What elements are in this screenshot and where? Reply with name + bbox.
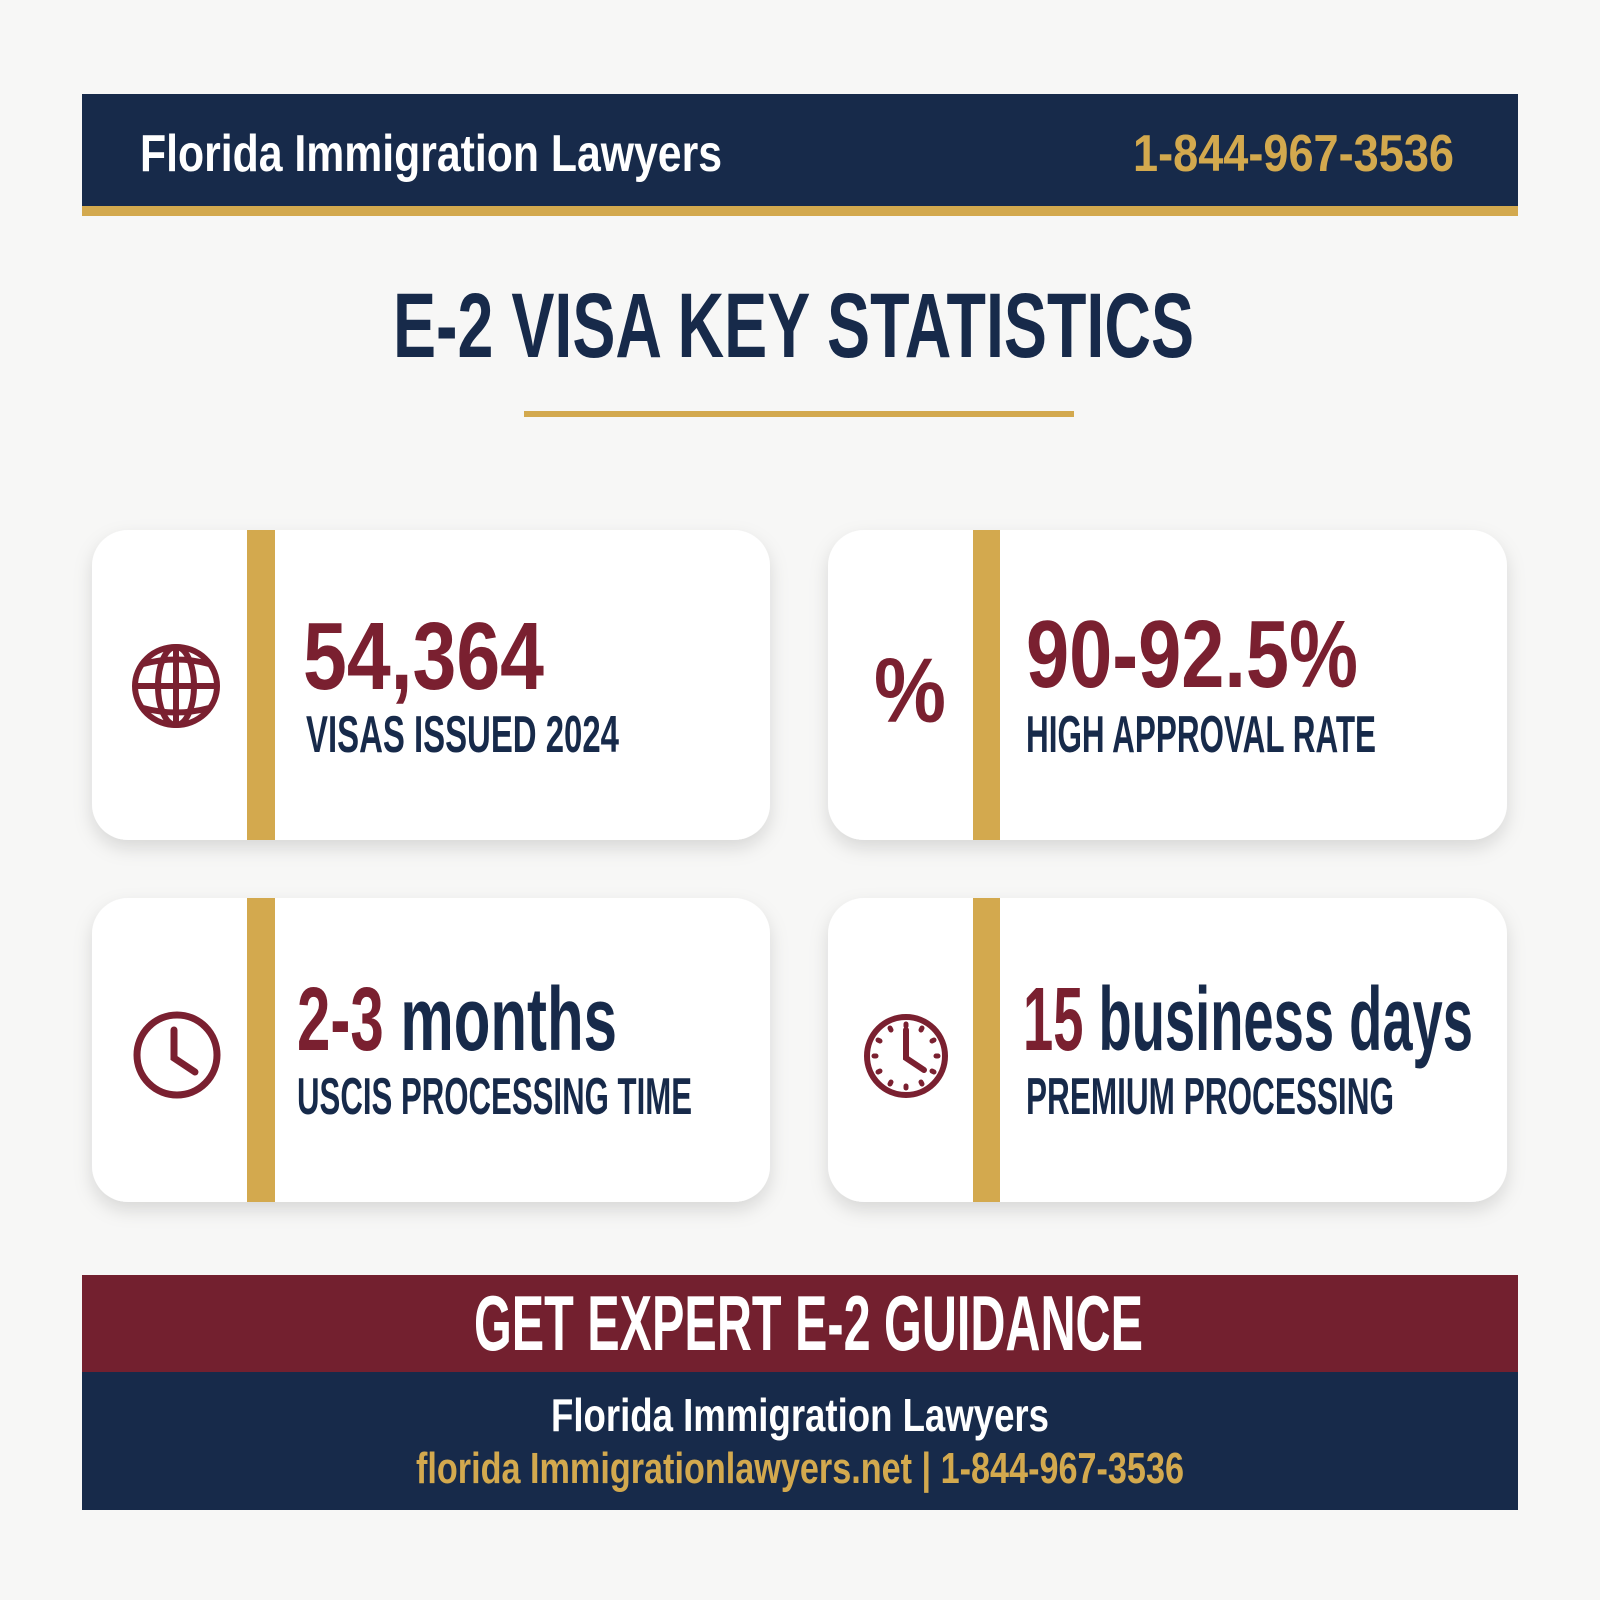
stat label: VISAS ISSUED 2024 [306, 706, 619, 764]
stat label: HIGH APPROVAL RATE [1026, 706, 1376, 764]
icon: globe [135, 647, 217, 725]
icon: clock with ticks [867, 1017, 945, 1095]
stat number: 2-3 months [297, 970, 617, 1070]
title: E-2 VISA KEY STATISTICS [393, 275, 1194, 377]
cta heading: GET EXPERT E-2 GUIDANCE [474, 1279, 1143, 1367]
title underline [524, 411, 1074, 417]
stat label: USCIS PROCESSING TIME [297, 1068, 692, 1126]
stat number: 54,364 [303, 603, 544, 710]
header firm name: Florida Immigration Lawyers [140, 125, 722, 183]
footer firm name: Florida Immigration Lawyers [551, 1389, 1049, 1441]
footer contact: florida Immigrationlawyers.net | 1-844-967-3536 [416, 1444, 1184, 1494]
card: premium processing [828, 898, 1507, 1202]
icon: percent: % [874, 640, 946, 742]
card: visas issued [92, 530, 770, 840]
card: processing time [92, 898, 770, 1202]
stat number: 90-92.5% [1026, 601, 1358, 708]
header bar [82, 94, 1518, 216]
icon: clock [137, 1015, 217, 1095]
header phone: 1-844-967-3536 [1133, 125, 1454, 183]
call to action banner [82, 1275, 1518, 1510]
card: approval rate [828, 530, 1507, 840]
